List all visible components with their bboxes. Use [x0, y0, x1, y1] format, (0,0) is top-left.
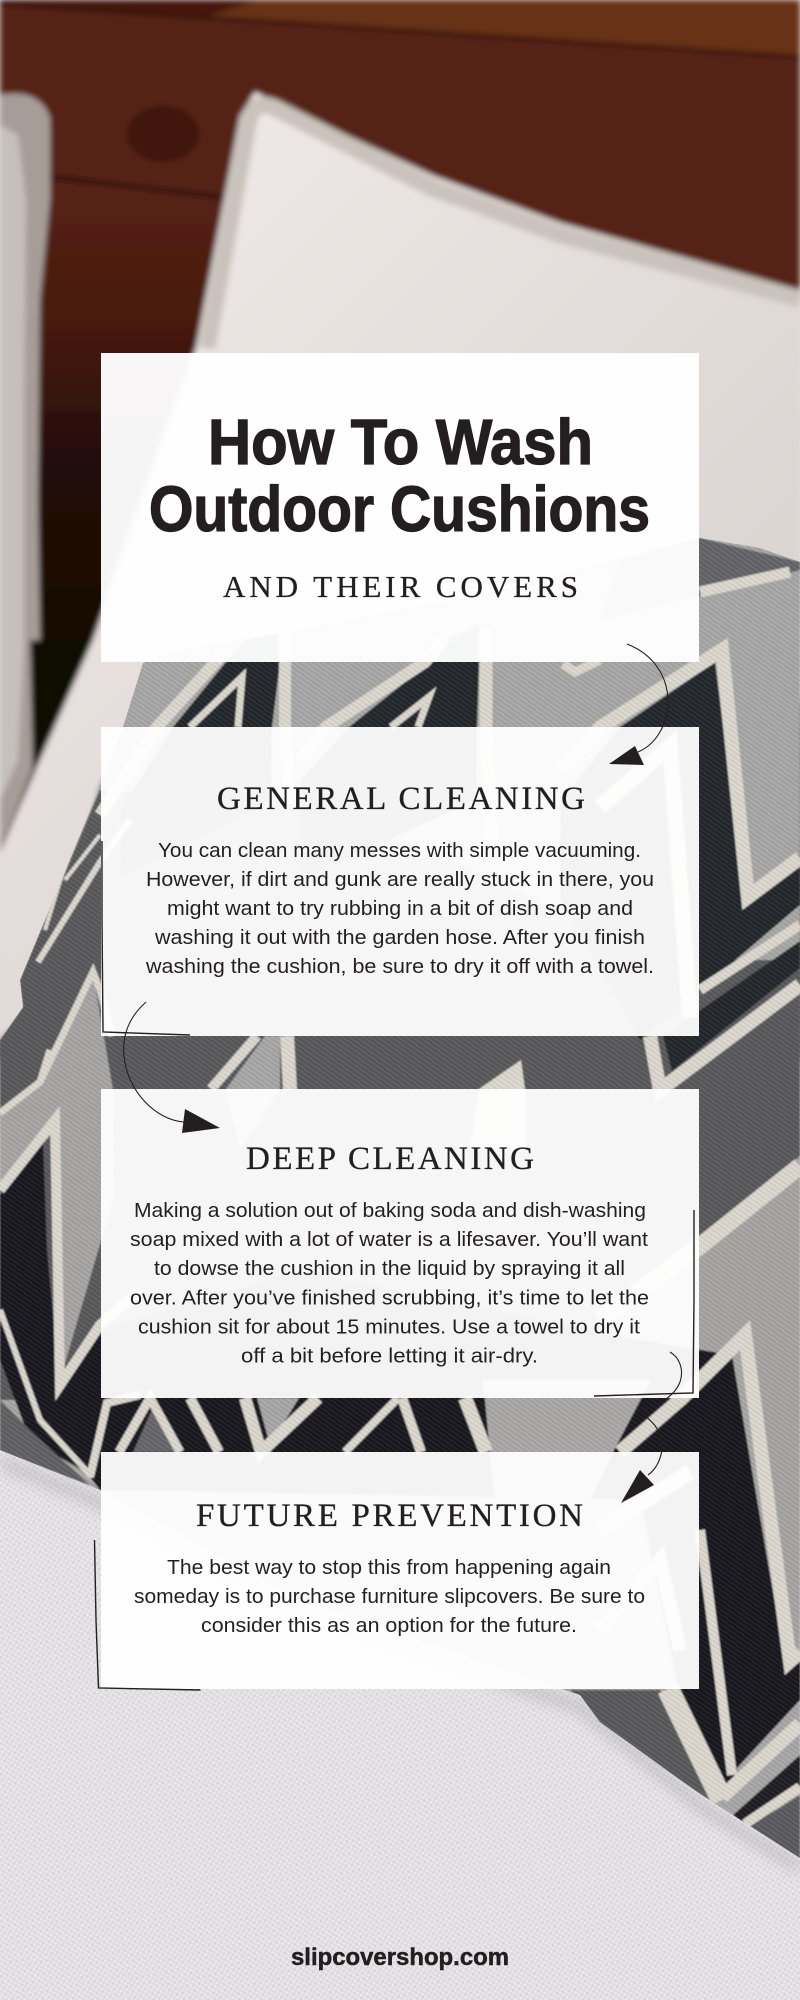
text block: general cleaning	[145, 839, 654, 978]
panel: deep cleaning	[101, 1089, 699, 1398]
bracket: future prevention corner	[94, 1540, 200, 1690]
text block: deep cleaning: Making a solution out of baking soda and dish-washing	[134, 1199, 646, 1222]
panel: general cleaning	[101, 727, 699, 1036]
text block: general cleaning: washing the cushion, be sure to dry it off with a towel.	[145, 955, 654, 978]
arrow: general cleaning to deep cleaning	[124, 1002, 220, 1133]
text block: future prevention: consider this as an option for the future.	[201, 1614, 577, 1637]
subtitle: AND THEIR COVERS	[223, 569, 578, 604]
bracket: general cleaning corner	[102, 841, 190, 1035]
background photo: patterned zigzag cushion	[0, 520, 800, 1880]
panel: title card	[101, 353, 699, 662]
text block: deep cleaning: cushion sit for about 15 minutes. Use a towel to dry it	[138, 1316, 640, 1338]
text block: deep cleaning: over. After you’ve finished scrubbing, it’s time to let the	[130, 1286, 649, 1310]
text block: general cleaning: washing it out with the garden hose. After you finish	[154, 926, 645, 949]
text block: future prevention: The best way to stop this from happening again	[167, 1556, 611, 1579]
text block: future prevention	[134, 1556, 645, 1637]
heading: general cleaning: GENERAL CLEANING	[217, 781, 585, 817]
heading: deep cleaning: DEEP CLEANING	[246, 1141, 534, 1177]
text block: deep cleaning: soap mixed with a lot of water is a lifesaver. You’ll want	[130, 1228, 648, 1251]
background photo: white fabric surface	[0, 1400, 800, 2000]
arrow: title to general cleaning	[609, 644, 668, 765]
heading: future prevention: FUTURE PREVENTION	[196, 1498, 583, 1534]
shadow under patterned cushion	[0, 1462, 800, 1868]
text block: deep cleaning: to dowse the cushion in the liquid by spraying it all	[154, 1257, 625, 1280]
text block: deep cleaning	[130, 1199, 649, 1368]
footer: website: slipcovershop.com	[291, 1944, 509, 1971]
text block: general cleaning: You can clean many messes with simple vacuuming.	[158, 839, 641, 862]
title: How To Wash	[208, 406, 593, 478]
title: Outdoor Cushions	[149, 473, 650, 545]
bracket: deep cleaning corner	[594, 1210, 694, 1396]
background photo: wooden bench and cream cushions	[0, 0, 800, 1060]
text block: deep cleaning: off a bit before letting it air-dry.	[241, 1344, 538, 1368]
text block: future prevention: someday is to purchase furniture slipcovers. Be sure to	[134, 1585, 645, 1608]
panel: future prevention	[101, 1452, 699, 1689]
text block: general cleaning: might want to try rubbing in a bit of dish soap and	[167, 897, 633, 920]
arrow: deep cleaning to future prevention	[621, 1352, 682, 1503]
text block: general cleaning: However, if dirt and gunk are really stuck in there, you	[146, 868, 654, 891]
title	[149, 406, 650, 545]
